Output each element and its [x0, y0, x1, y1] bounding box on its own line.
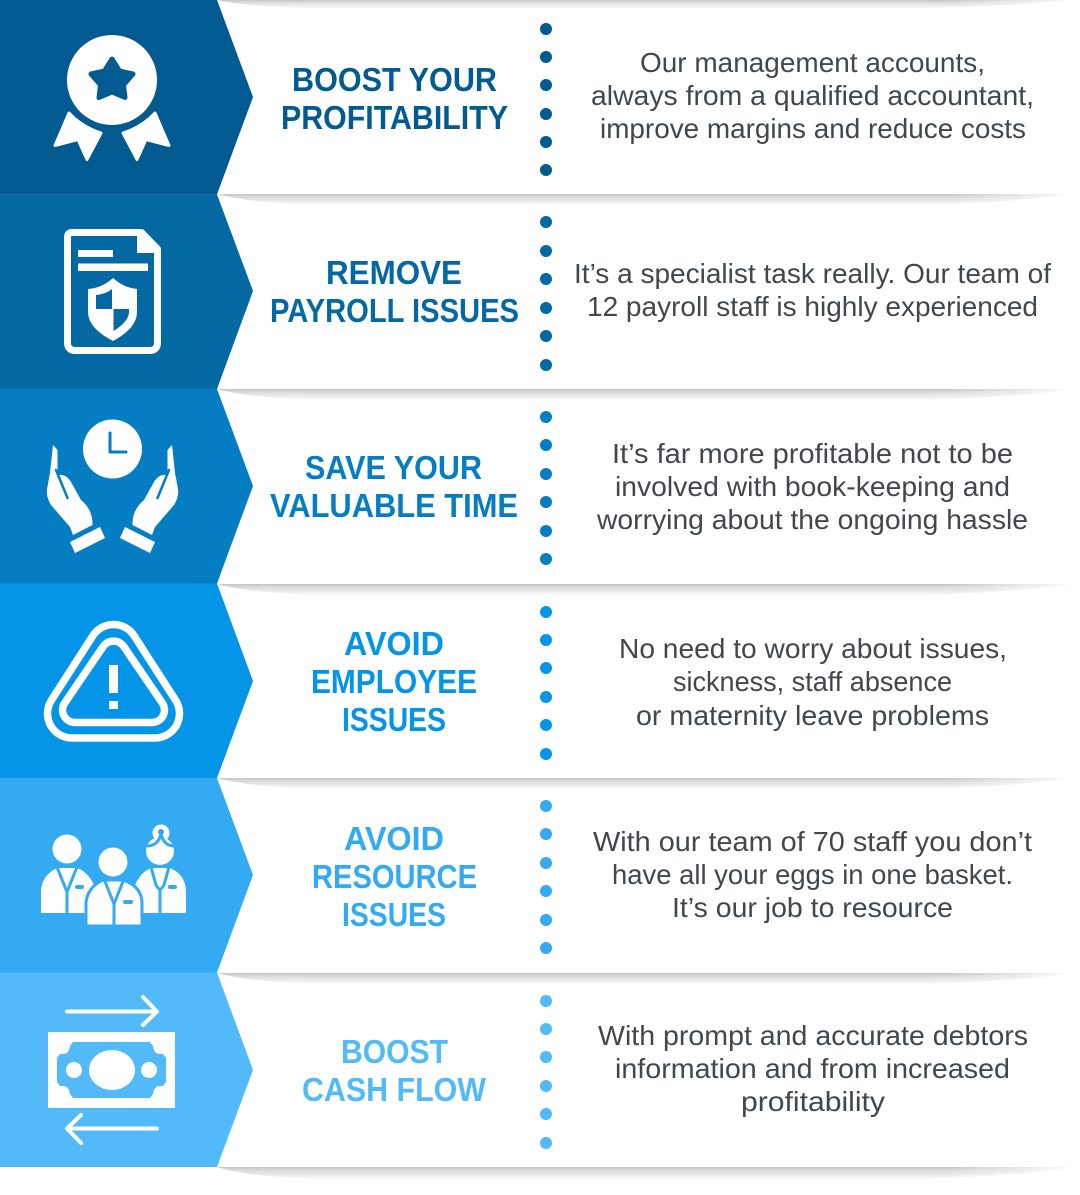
icon: document with shield [68, 232, 158, 350]
heading: AVOID [344, 821, 444, 858]
description [619, 633, 1007, 731]
icon: hands holding clock [47, 420, 178, 553]
description: No need to worry about issues, [619, 633, 1007, 664]
arrow band 3 [0, 389, 253, 584]
description: always from a qualified accountant, [591, 80, 1034, 111]
description: 12 payroll staff is highly experienced [587, 291, 1038, 322]
arrow band 5 [0, 778, 253, 972]
description [591, 47, 1034, 144]
heading: AVOID [344, 626, 444, 663]
dotted divider [540, 23, 552, 176]
description: profitability [741, 1086, 885, 1117]
heading: BOOST [341, 1034, 448, 1071]
heading: SAVE YOUR [305, 450, 482, 487]
description: have all your eggs in one basket. [612, 859, 1013, 890]
description [598, 1020, 1028, 1117]
icon: award rosette [55, 35, 169, 160]
icon: banknote with arrows [48, 997, 175, 1143]
description: Our management accounts, [640, 47, 985, 78]
heading: EMPLOYEE [311, 664, 477, 701]
heading: CASH FLOW [302, 1072, 486, 1109]
heading [302, 1034, 486, 1109]
description: It’s a specialist task really. Our team of [574, 258, 1051, 289]
arrow band 6 [0, 972, 253, 1167]
description: worrying about the ongoing hassle [596, 504, 1028, 535]
icon: team of three staff [41, 824, 186, 927]
heading [312, 821, 477, 934]
heading [270, 255, 519, 330]
panel: avoid employee issues [0, 584, 1007, 778]
arrow band 2 [0, 194, 253, 389]
dotted divider [540, 800, 552, 954]
description: sickness, staff absence [673, 666, 952, 697]
description: information and from increased [615, 1053, 1010, 1084]
description [574, 258, 1051, 322]
heading [281, 62, 508, 137]
heading: PROFITABILITY [281, 100, 508, 137]
description [596, 438, 1028, 535]
heading: RESOURCE [312, 859, 477, 896]
dotted divider [540, 216, 552, 371]
arrow band 4 [0, 584, 253, 778]
heading [270, 450, 518, 525]
description: It’s our job to resource [672, 892, 953, 923]
description: improve margins and reduce costs [600, 113, 1026, 144]
panel: boost cash flow [0, 972, 1028, 1167]
arrow band 1 [0, 0, 253, 194]
description: With our team of 70 staff you don’t [593, 826, 1032, 857]
heading: REMOVE [326, 255, 462, 292]
panel: save your valuable time [0, 389, 1028, 584]
description: involved with book-keeping and [615, 471, 1010, 502]
dotted divider [540, 995, 552, 1149]
description [593, 826, 1032, 923]
description: or maternity leave problems [636, 700, 989, 731]
heading: ISSUES [342, 897, 446, 934]
dotted divider [540, 606, 552, 760]
heading: VALUABLE TIME [270, 488, 518, 525]
icon: warning triangle [48, 625, 179, 738]
panel: remove payroll issues [0, 194, 1051, 389]
panel: boost your profitability [0, 0, 1034, 194]
heading [311, 626, 477, 739]
panel: avoid resource issues [0, 778, 1032, 972]
heading: BOOST YOUR [292, 62, 497, 99]
description: It’s far more profitable not to be [612, 438, 1013, 469]
description: With prompt and accurate debtors [598, 1020, 1028, 1051]
dotted divider [540, 411, 552, 565]
heading: PAYROLL ISSUES [270, 293, 519, 330]
heading: ISSUES [342, 702, 446, 739]
